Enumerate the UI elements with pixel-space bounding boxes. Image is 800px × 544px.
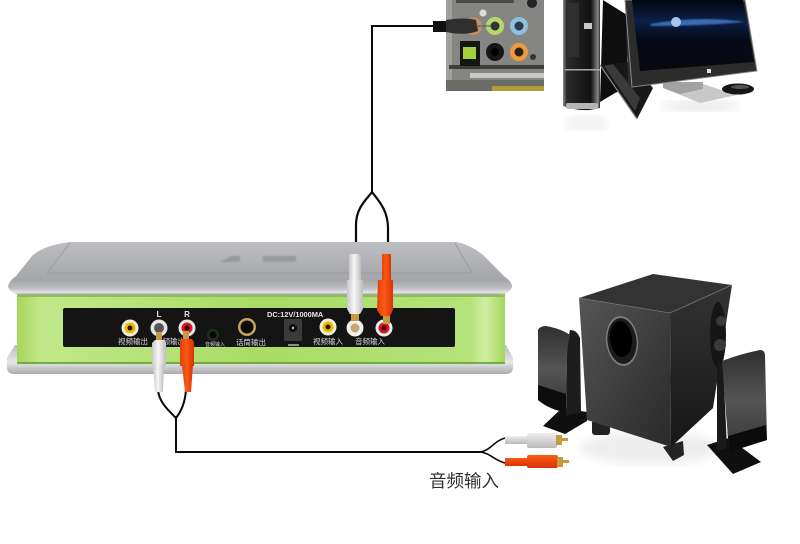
port labels: 话筒输出 xyxy=(236,337,266,347)
port labels: DC:12V/1000MA xyxy=(267,310,324,319)
plug into PC port xyxy=(433,18,492,34)
port labels: 音频输出 xyxy=(155,336,185,346)
RCA plugs into box audio input xyxy=(347,254,393,324)
base plate xyxy=(7,345,513,374)
RCA plugs into box audio output xyxy=(152,331,194,392)
port labels: R xyxy=(184,310,190,319)
port labels: 音频输入 xyxy=(355,336,385,346)
jacks xyxy=(122,318,392,345)
port labels: 音频输入 xyxy=(205,341,225,348)
port labels xyxy=(118,310,385,348)
motherboard audio ports xyxy=(446,0,544,91)
video box xyxy=(7,242,513,374)
lower cable from box audio output xyxy=(158,390,505,463)
keyboard xyxy=(600,62,653,119)
caption: 音频输入 xyxy=(429,471,499,491)
port labels: L xyxy=(157,310,162,319)
monitor xyxy=(625,0,757,111)
side controls xyxy=(710,302,726,368)
port labels: 视频输出 xyxy=(118,336,148,346)
silver lid xyxy=(8,242,512,295)
green body xyxy=(17,290,505,364)
left satellite speaker xyxy=(538,326,587,434)
black connector panel xyxy=(63,308,455,347)
PC tower xyxy=(563,0,627,130)
cable from PC to player audio input xyxy=(356,26,433,256)
mouse xyxy=(722,84,754,94)
bass port xyxy=(603,314,641,368)
subwoofer shadow xyxy=(580,432,720,464)
RCA plugs to speakers xyxy=(505,433,569,468)
right satellite speaker xyxy=(707,350,767,474)
port labels: 视频输入 xyxy=(313,336,343,346)
embossed logo xyxy=(220,256,296,262)
subwoofer xyxy=(579,274,732,461)
